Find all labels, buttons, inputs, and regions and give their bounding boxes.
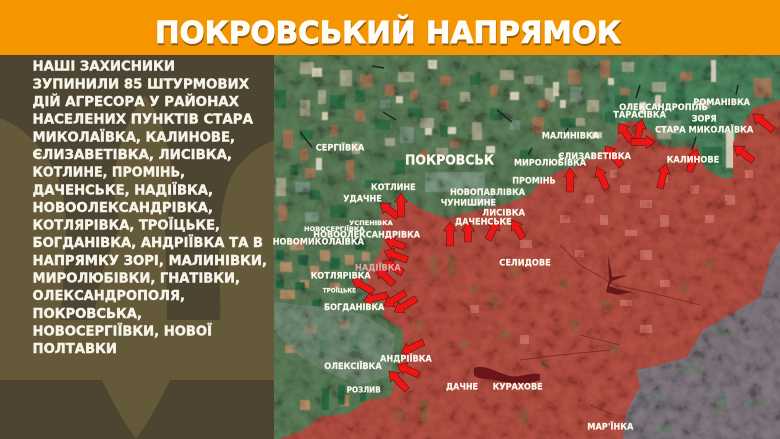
grey urban zone xyxy=(623,240,780,439)
text block: defenders report: КОТЛИНЕ, ПРОМІНЬ, xyxy=(32,166,185,181)
map labels: settlements: ОЛЕКСІЇВКА xyxy=(324,361,382,372)
text block: defenders report: НАПРЯМКУ ЗОРІ, МАЛИНІВКИ, xyxy=(32,254,267,269)
attack arrows xyxy=(349,109,777,394)
map labels: settlements: МАР'ЇНКА xyxy=(587,421,633,432)
map labels: settlements: ПРОМІНЬ xyxy=(512,176,556,186)
icon: trident emblem xyxy=(0,95,275,439)
map labels: settlements: РОМАНІВКА xyxy=(693,98,750,108)
text block: defenders report: ПОЛТАВКИ xyxy=(32,342,117,357)
map labels: settlements: НОВОПАВЛІВКА xyxy=(450,188,525,198)
map labels: settlements: ЛИСІВКА xyxy=(482,209,525,219)
map labels: settlements: КУРАХОВЕ xyxy=(493,382,543,392)
map labels: settlements: ТАРАСІВКА xyxy=(613,111,666,121)
text block: defenders report: БОГДАНІВКА, АНДРІЇВКА ТА В xyxy=(32,235,263,251)
map labels: settlements: НОВОСЕРГІЇВКА xyxy=(304,224,364,233)
text block: defenders report: МИКОЛАЇВКА, КАЛИНОВЕ, xyxy=(32,129,235,145)
map labels: settlements: ПОКРОВСЬК xyxy=(405,152,494,168)
map labels: settlements: НОВООЛЕКСАНДРІВКА xyxy=(313,231,420,241)
map labels: settlements: УСПЕНІВКА xyxy=(349,219,393,227)
map labels: settlements: УДАЧНЕ xyxy=(343,195,382,205)
map labels: settlements: ЗОРЯ xyxy=(692,115,717,125)
map labels: settlements: МАЛИНІВКА xyxy=(542,131,599,141)
map labels: settlements: ДАЧЕНСЬКЕ xyxy=(455,217,512,227)
map labels: settlements: СЕЛИДОВЕ xyxy=(499,258,551,268)
panel: left text background with trident emblem xyxy=(0,55,275,439)
map labels: settlements: РОЗЛИВ xyxy=(347,386,381,395)
map labels: settlements: НОВОМИКОЛАЇВКА xyxy=(273,236,364,247)
text block: defenders report: НОВООЛЕКСАНДРІВКА, xyxy=(32,201,213,216)
map labels: settlements: ОЛЕКСАНДРОПІЛЬ xyxy=(619,103,708,113)
map labels: settlements: ДАЧНЕ xyxy=(446,382,478,392)
map labels: settlements: МИРОЛЮБІВКА xyxy=(514,159,586,169)
red occupied zone xyxy=(280,100,780,439)
text block: defenders report: МИРОЛЮБІВКИ, ГНАТІВКИ, xyxy=(32,272,240,286)
text block: defenders report: ДАЧЕНСЬКЕ, НАДІЇВКА, xyxy=(32,182,213,198)
title: ПОКРОВСЬКИЙ НАПРЯМОК xyxy=(155,15,621,51)
valley: grey-green settled area xyxy=(274,302,395,385)
text block: defenders report: ПОКРОВСЬКА, xyxy=(32,307,142,322)
title: ПОКРОВСЬКИЙ НАПРЯМОК xyxy=(156,17,622,53)
map labels: settlements: КОТЛИНЕ xyxy=(371,183,416,193)
text block: defenders report: ЗУПИНИЛИ 85 ШТУРМОВИХ xyxy=(32,77,249,92)
water bodies and rivers xyxy=(300,66,738,415)
Kurakhove reservoir xyxy=(474,367,540,384)
map labels: settlements xyxy=(273,98,753,432)
map labels: settlements: СЕРГІЇВКА xyxy=(316,143,364,154)
map labels: settlements: КОТЛЯРІВКА xyxy=(311,271,371,281)
text block: defenders report xyxy=(32,60,267,357)
map labels: settlements: ТРОЇЦЬКЕ xyxy=(323,286,356,295)
text block: defenders report: ЄЛИЗАВЕТІВКА, ЛИСІВКА, xyxy=(32,148,232,163)
text block: defenders report: НАШІ ЗАХИСНИКИ xyxy=(32,60,175,75)
panel: satellite map xyxy=(274,55,780,439)
text block: defenders report: ОЛЕКСАНДРОПОЛЯ, xyxy=(32,289,185,304)
map labels: settlements: БОГДАНІВКА xyxy=(324,303,384,313)
map labels: settlements: ЄЛИЗАВЕТІВКА xyxy=(558,152,631,162)
map labels: settlements: КАЛИНОВЕ xyxy=(667,155,719,165)
texture overlay xyxy=(274,55,780,439)
header band xyxy=(0,0,780,55)
map labels: settlements: ЧУНИШИНЕ xyxy=(441,199,496,209)
map labels: settlements: НАДІЇВКА xyxy=(355,263,401,274)
map labels: settlements: АНДРІЇВКА xyxy=(380,354,432,365)
text block: defenders report: ДІЙ АГРЕСОРА У РАЙОНАХ xyxy=(32,94,239,110)
text block: defenders report: КОТЛЯРІВКА, ТРОЇЦЬКЕ, xyxy=(32,218,220,234)
text block: defenders report: НОВОСЕРГІЇВКИ, НОВОЇ xyxy=(32,324,212,340)
map labels: settlements: СТАРА МИКОЛАЇВКА xyxy=(655,124,753,135)
Karlivka reservoir xyxy=(606,255,632,295)
text block: defenders report: НАСЕЛЕНИХ ПУНКТІВ СТАРА xyxy=(32,113,253,128)
